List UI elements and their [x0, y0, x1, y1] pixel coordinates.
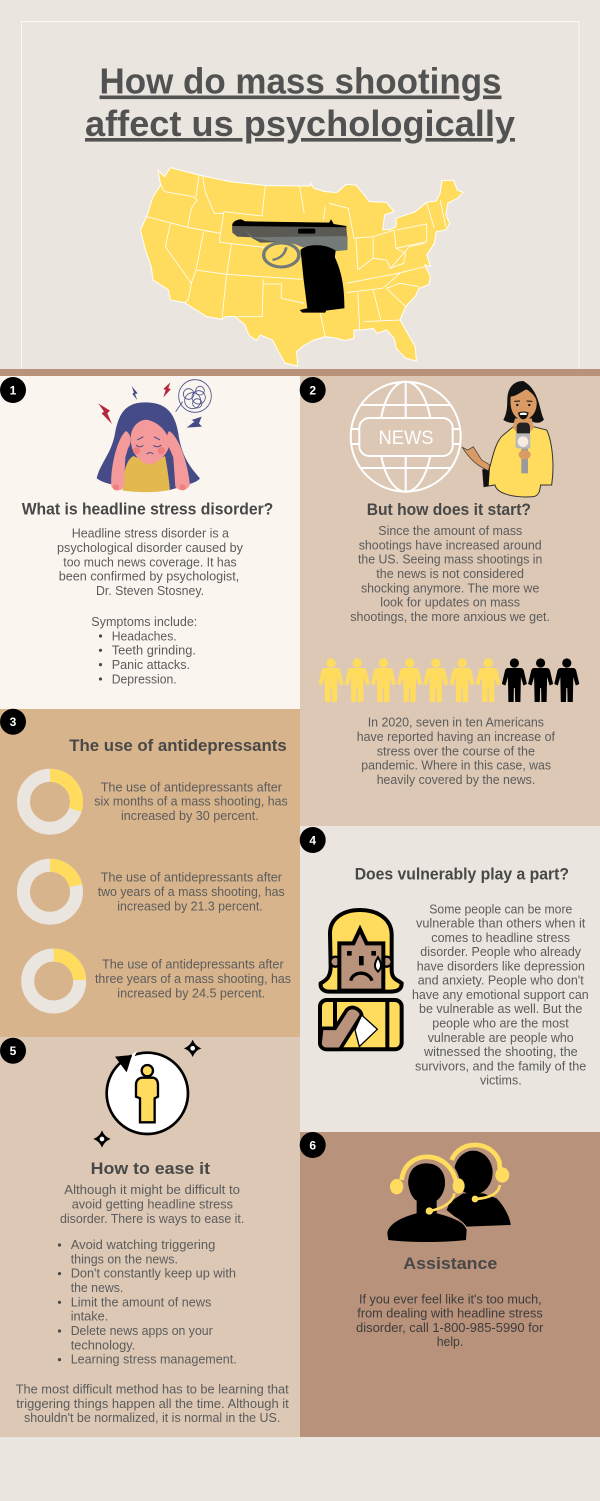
donut chart: 21.3 percent — [24, 865, 76, 918]
text block: three years — [95, 956, 291, 1000]
text block: two years: two years of a mass shooting, has — [98, 884, 285, 899]
list: ways to ease it — [58, 1237, 237, 1367]
text block: symptoms: Symptoms include: — [91, 614, 197, 629]
divider band — [0, 369, 600, 376]
text block: vulnerability: Some people can be more — [429, 901, 572, 916]
text block: definition: Headline stress disorder is a — [72, 526, 230, 541]
text block: symptoms: Teeth grinding. — [112, 643, 196, 658]
text block: closing: triggering things happen all the time. Although it — [16, 1396, 289, 1411]
donut chart: 24.5 percent — [28, 955, 80, 1007]
panel 5: how to ease it — [0, 1037, 300, 1437]
text block: intro: avoid getting headline stress — [72, 1196, 233, 1212]
badge 6 — [300, 1132, 326, 1158]
text block: closing: The most difficult method has to be learning that — [16, 1381, 289, 1396]
text block: intro — [350, 523, 550, 624]
text block: vulnerability: be vulnerable as well. But the — [419, 1001, 582, 1016]
list: ways to ease it: Learning stress management. — [71, 1352, 237, 1367]
text block: statistic: pandemic. Where in this case, was — [361, 758, 551, 773]
badge 1: 1 — [10, 384, 17, 398]
badge 5 — [0, 1038, 26, 1064]
text block: symptoms — [91, 614, 197, 686]
text block: intro: shocking anymore. The more we — [361, 580, 539, 595]
text block: helpline: disorder, call 1-800-985-5990 for — [356, 1320, 544, 1335]
text block: two years — [98, 870, 285, 913]
text block: symptoms: Depression. — [112, 671, 177, 686]
text block: intro: Although it might be difficult to — [64, 1182, 240, 1197]
text block: six months: increased by 30 percent. — [121, 808, 259, 823]
text block: intro: shootings, the more anxious we get. — [350, 609, 550, 624]
list: ways to ease it: Delete news apps on your — [71, 1323, 213, 1338]
text block: intro: Since the amount of mass — [378, 523, 523, 538]
title: affect us psychologically — [85, 103, 515, 144]
text block: statistic: stress over the course of the — [377, 743, 535, 758]
text block: helpline: If you ever feel like it's too much, — [359, 1291, 542, 1306]
header frame and title area — [22, 22, 579, 382]
icon: news globe: NEWS — [378, 428, 434, 449]
list: ways to ease it: things on the news. — [71, 1251, 178, 1266]
text block: statistic: have reported having an increase of — [357, 729, 555, 744]
icon: handgun — [232, 219, 347, 313]
badge 6: 6 — [309, 1138, 316, 1152]
heading: What is headline stress disorder? — [22, 500, 273, 518]
text block: statistic: heavily covered by the news. — [377, 772, 535, 787]
panel 3: antidepressants — [0, 709, 300, 1037]
text block: definition: been confirmed by psychologist, — [59, 569, 239, 584]
text block: vulnerability: have disorders like depression — [417, 958, 585, 973]
text block: definition: too much news coverage. It has — [63, 554, 237, 569]
badge 4 — [300, 827, 326, 853]
text block: definition: psychological disorder caused by — [57, 540, 243, 555]
list: ways to ease it: technology. — [71, 1337, 135, 1352]
list: ways to ease it: Don't constantly keep up with — [71, 1266, 236, 1281]
text block: intro: look for updates on mass — [380, 595, 520, 610]
text block: helpline — [356, 1291, 544, 1349]
icon: person in refresh circle with sparkles — [93, 1040, 201, 1148]
badge 2: 2 — [309, 384, 316, 398]
donut chart: 30 percent — [24, 775, 77, 828]
badge 3: 3 — [10, 715, 17, 729]
text block: vulnerability: vulnerable are people who — [428, 1030, 574, 1045]
text block: helpline: help. — [437, 1334, 463, 1349]
text block: vulnerability — [412, 901, 589, 1088]
text block: three years: increased by 24.5 percent. — [117, 985, 265, 1000]
panel 4: vulnerability — [300, 826, 600, 1132]
icon: stressed woman — [97, 380, 211, 492]
badge 4: 4 — [309, 834, 316, 848]
text block: definition: Dr. Steven Stosney. — [96, 583, 204, 598]
heading: But how does it start? — [367, 500, 531, 519]
icon: helpline operators — [387, 1145, 511, 1242]
text block: closing — [16, 1381, 289, 1425]
panel 1: headline stress disorder — [0, 376, 300, 709]
text block: vulnerability: and anxiety. People who don't — [418, 973, 584, 988]
text block: three years: three years of a mass shooting, has — [95, 971, 291, 986]
heading: The use of antidepressants — [69, 736, 287, 755]
text block: two years: The use of antidepressants after — [101, 870, 283, 885]
text block: helpline: from dealing with headline stress — [357, 1306, 543, 1321]
list: ways to ease it: Avoid watching triggering — [71, 1237, 215, 1252]
text block: six months: six months of a mass shooting, has — [94, 794, 288, 809]
text block: six months: The use of antidepressants after — [101, 780, 283, 795]
text block: closing: shouldn't be normalized, it is normal in the US. — [24, 1410, 280, 1425]
text block: three years: The use of antidepressants after — [102, 956, 284, 971]
text block: vulnerability: have any emotional support can — [412, 987, 589, 1002]
list: ways to ease it: the news. — [71, 1280, 123, 1295]
icon: US map — [140, 168, 463, 366]
text block: six months — [94, 780, 288, 823]
text block: intro: disorder. There is ways to ease it. — [60, 1211, 244, 1226]
text block: intro: the US. Seeing mass shootings in — [358, 552, 542, 567]
text block: vulnerability: witnessed the shooting, the — [423, 1044, 578, 1059]
text block: intro: shootings have increased around — [359, 537, 542, 552]
heading: Assistance — [403, 1254, 497, 1273]
text block: vulnerability: people who are the most — [432, 1016, 569, 1030]
text block: vulnerability: disorder. People who already — [420, 944, 581, 959]
text block: intro: the news is not considered — [376, 566, 524, 581]
text block: vulnerability: vulnerable than others when it — [416, 916, 586, 931]
title — [85, 60, 515, 144]
badge 1 — [0, 377, 26, 403]
text block: vulnerability: survivors, and the family of the — [415, 1058, 586, 1073]
icon: crying woman — [320, 910, 402, 1049]
icon: news reporter — [462, 381, 553, 497]
pictogram: seven in ten people — [318, 658, 579, 702]
text block: vulnerability: victims. — [480, 1073, 522, 1088]
text block: statistic — [357, 715, 555, 787]
text block: vulnerability: comes to headline stress — [431, 930, 570, 945]
icon: news globe — [351, 382, 461, 492]
heading: Does vulnerably play a part? — [355, 864, 569, 883]
text block: statistic: In 2020, seven in ten Americans — [368, 715, 544, 730]
list: ways to ease it: intake. — [71, 1309, 108, 1324]
heading: How to ease it — [91, 1159, 210, 1178]
badge 2 — [300, 377, 326, 403]
text block: intro — [60, 1182, 244, 1226]
list: ways to ease it: Limit the amount of news — [71, 1294, 212, 1309]
text block: definition — [57, 526, 243, 598]
badge 5: 5 — [10, 1044, 17, 1058]
badge 3 — [0, 709, 26, 735]
panel 2: how does it start — [300, 376, 600, 826]
panel 6: assistance — [300, 1132, 600, 1437]
title: How do mass shootings — [100, 60, 502, 102]
text block: symptoms: Headaches. — [112, 628, 177, 643]
text block: two years: increased by 21.3 percent. — [117, 898, 263, 913]
text block: symptoms: Panic attacks. — [112, 657, 190, 672]
